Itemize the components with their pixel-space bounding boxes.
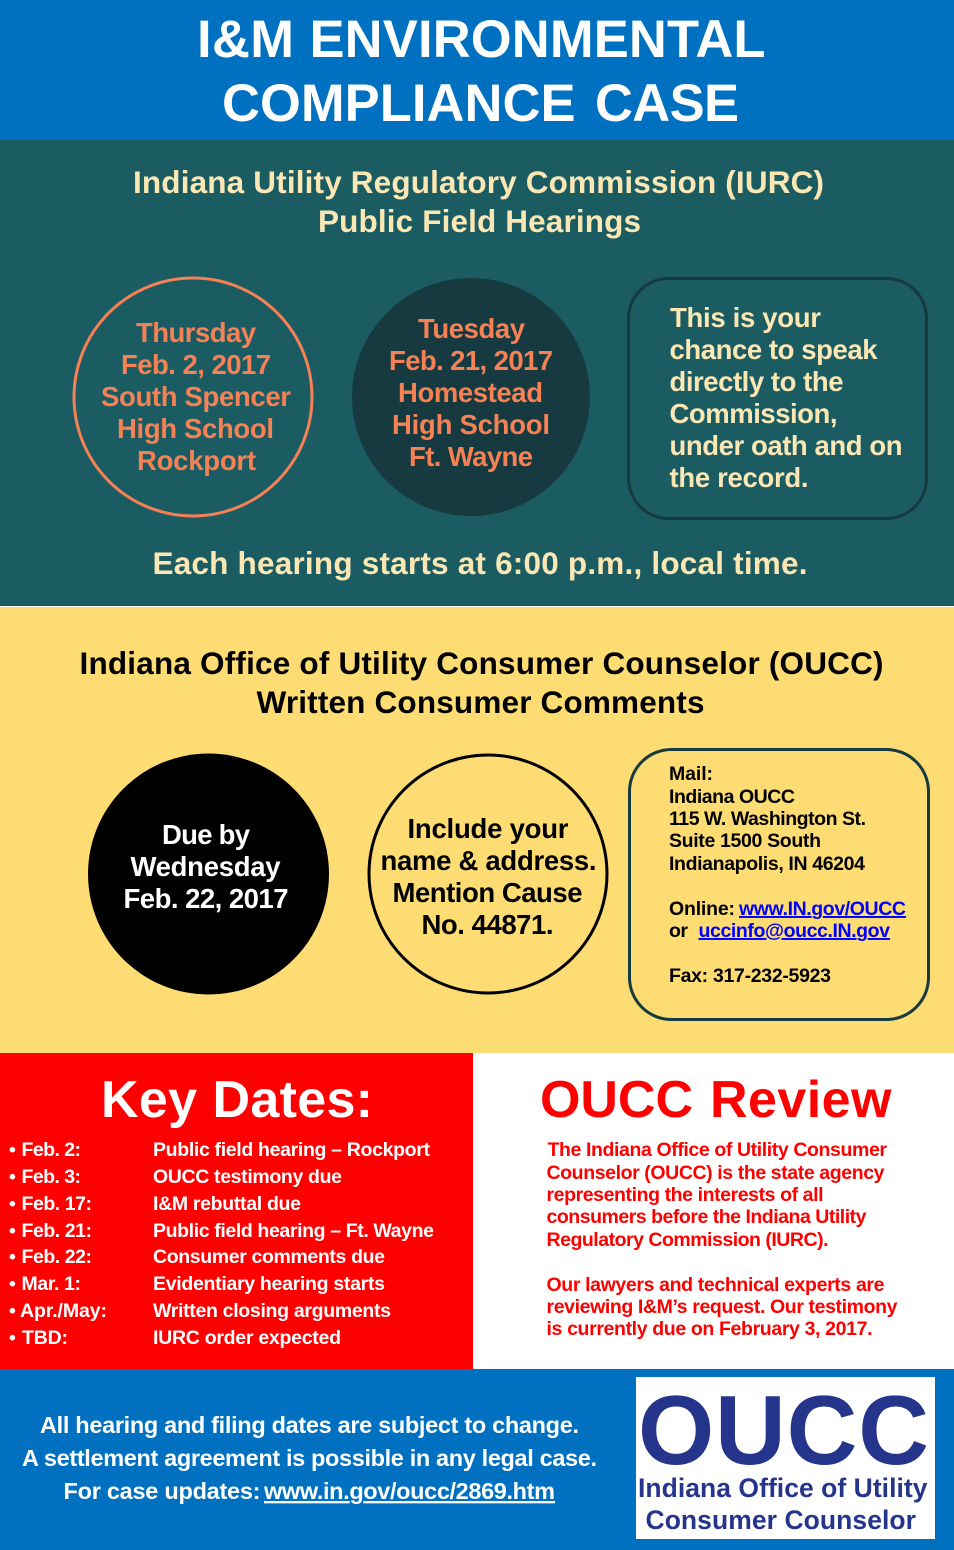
OUCC review description: representing the interests of all (546, 1184, 824, 1206)
title: ENVIRONMENTAL (310, 10, 766, 69)
key dates list: • (9, 1139, 16, 1161)
panel: written consumer comments (0, 607, 954, 1053)
circle: Rockport hearing: Thursday (136, 317, 257, 348)
key dates list: Written closing arguments (153, 1300, 391, 1322)
OUCC logo: Consumer Counselor (646, 1505, 916, 1535)
comments heading (80, 645, 884, 720)
OUCC review description: reviewing I&M’s request. Our testimony (546, 1296, 898, 1318)
contact box: Online: (669, 898, 735, 920)
key dates heading: Key (101, 1071, 197, 1129)
circle: Ft. Wayne hearing: Feb. 21, 2017 (389, 345, 553, 376)
key dates list: Evidentiary hearing starts (153, 1273, 385, 1295)
OUCC review heading: OUCC (540, 1071, 693, 1129)
key dates list: • (9, 1327, 16, 1349)
contact box: 115 W. Washington St. (669, 808, 866, 830)
circle: Ft. Wayne hearing: Tuesday (418, 313, 526, 344)
footer notes: A settlement agreement is possible in any legal case. (22, 1445, 597, 1471)
key dates list: • (9, 1220, 16, 1242)
key dates list: Public field hearing – Ft. Wayne (153, 1220, 434, 1242)
hearings heading (133, 164, 824, 239)
callout: chance to speak: Commission, (670, 398, 838, 429)
panel: key dates (0, 1053, 473, 1369)
footer notes: For case updates: (64, 1478, 260, 1504)
circle: due date: Feb. 22, 2017 (124, 883, 288, 914)
contact box: www.IN.gov/OUCC (738, 898, 906, 920)
key dates list: Feb. 3: (22, 1166, 81, 1188)
circle: include name and cause number: Mention Cause (392, 877, 582, 908)
key dates list: Consumer comments due (153, 1246, 385, 1268)
key dates heading (101, 1071, 373, 1129)
panel: footer (0, 1369, 954, 1550)
hearings heading: Public Field Hearings (318, 203, 641, 239)
OUCC review description: Our lawyers and technical experts are (546, 1274, 885, 1296)
circle: Rockport hearing: South Spencer (101, 381, 291, 412)
circle: include name and cause number: No. 44871. (422, 909, 554, 940)
key dates list: • (9, 1166, 16, 1188)
key dates list: Public field hearing – Rockport (153, 1139, 430, 1161)
contact box: Indianapolis, IN 46204 (669, 853, 865, 875)
title: CASE (595, 74, 739, 133)
hearings heading: Indiana Utility Regulatory Commission (IURC) (133, 164, 824, 200)
contact box: uccinfo@oucc.IN.gov (698, 920, 890, 942)
circle: Rockport hearing: Feb. 2, 2017 (121, 349, 271, 380)
circle: include name and cause number: name & address. (380, 845, 596, 876)
key dates list: Mar. 1: (22, 1273, 81, 1295)
key dates list: Feb. 22: (22, 1246, 92, 1268)
circle: Ft. Wayne hearing: Ft. Wayne (409, 441, 533, 472)
contact box: Mail: (669, 763, 713, 785)
circle: include name and cause number: Include your (408, 813, 569, 844)
circle: due date: Wednesday (130, 851, 281, 882)
panel: public field hearings (0, 140, 954, 606)
hearing start time: Each hearing starts at 6:00 p.m., local time. (152, 545, 808, 581)
key dates list: TBD: (22, 1327, 68, 1349)
OUCC review description: Counselor (OUCC) is the state agency (546, 1162, 885, 1184)
circle: Ft. Wayne hearing: Homestead (398, 377, 543, 408)
title: I&M (197, 10, 294, 69)
OUCC review heading: Review (710, 1071, 892, 1129)
OUCC review heading (540, 1071, 892, 1129)
key dates list: • (9, 1193, 16, 1215)
title: COMPLIANCE (222, 74, 576, 133)
OUCC review description: consumers before the Indiana Utility (546, 1206, 867, 1228)
key dates list: • (9, 1246, 16, 1268)
key dates list: Feb. 17: (22, 1193, 92, 1215)
OUCC review description: The Indiana Office of Utility Consumer (548, 1139, 887, 1161)
key dates list: OUCC testimony due (153, 1166, 342, 1188)
footer notes (22, 1412, 597, 1504)
OUCC logo (636, 1375, 935, 1539)
title (197, 10, 766, 133)
key dates list: Apr./May: (20, 1300, 107, 1322)
callout: chance to speak: under oath and on (670, 430, 902, 461)
contact box: Suite 1500 South (669, 830, 821, 852)
circle: include name and cause number (369, 755, 607, 993)
callout: chance to speak (628, 278, 926, 518)
comments heading: Indiana Office of Utility Consumer Counselor (OUCC) (80, 645, 884, 681)
key dates list: • (9, 1300, 16, 1322)
OUCC review description (546, 1139, 898, 1340)
callout: chance to speak: the record. (670, 462, 808, 493)
key dates list: • (9, 1273, 16, 1295)
key dates list: I&M rebuttal due (153, 1193, 301, 1215)
contact box: or (669, 920, 688, 942)
circle: Ft. Wayne hearing: High School (392, 409, 550, 440)
callout: chance to speak: This is your (670, 302, 821, 333)
circle: Rockport hearing (74, 278, 312, 516)
key dates list: Feb. 2: (22, 1139, 81, 1161)
key dates list: IURC order expected (153, 1327, 341, 1349)
footer notes: www.in.gov/oucc/2869.htm (263, 1478, 555, 1504)
footer notes: All hearing and filing dates are subject to change. (40, 1412, 579, 1438)
comments heading: Written Consumer Comments (256, 684, 704, 720)
key dates list (9, 1139, 434, 1349)
circle: Rockport hearing: Rockport (137, 445, 256, 476)
header banner (0, 0, 954, 140)
contact box: Indiana OUCC (669, 786, 795, 808)
OUCC logo: OUCC (638, 1375, 929, 1485)
contact box: Fax: 317-232-5923 (669, 965, 831, 987)
key dates heading: Dates: (212, 1071, 373, 1129)
circle: due date (88, 754, 329, 994)
callout: chance to speak: chance to speak (670, 334, 878, 365)
circle: due date: Due by (162, 819, 251, 850)
circle: Ft. Wayne hearing (352, 278, 590, 516)
contact box (630, 750, 928, 1020)
panel: OUCC review (473, 1053, 954, 1369)
OUCC logo: Indiana Office of Utility (638, 1473, 928, 1503)
circle: Rockport hearing: High School (117, 413, 274, 444)
callout: chance to speak: directly to the (670, 366, 844, 397)
key dates list: Feb. 21: (22, 1220, 92, 1242)
OUCC review description: is currently due on February 3, 2017. (546, 1318, 872, 1340)
OUCC review description: Regulatory Commission (IURC). (546, 1229, 828, 1251)
